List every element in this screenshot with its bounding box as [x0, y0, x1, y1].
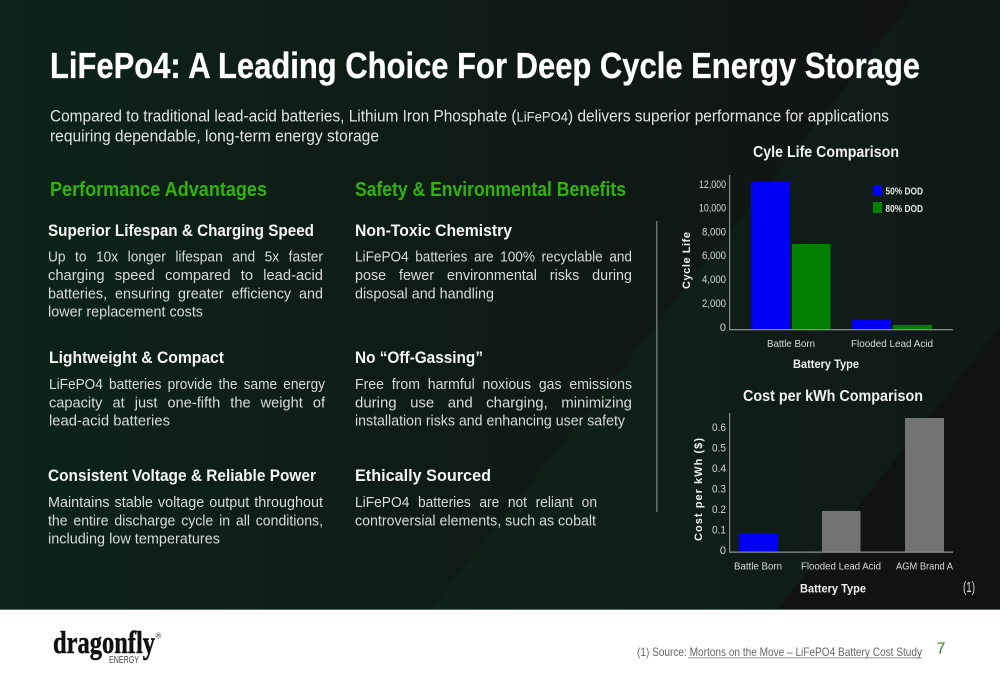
block: lightweight and compact: lead-acid batteries [49, 414, 170, 430]
block: consistent voltage: including low temperatures [48, 532, 220, 548]
block: non-toxic chemistry: disposal and handling [355, 286, 494, 302]
y axis labels [712, 422, 726, 557]
x axis labels [767, 338, 933, 350]
subtitle: requiring dependable, long-term energy storage [50, 128, 379, 146]
x axis labels: AGM Brand A [896, 560, 953, 572]
logo: dragonfly energy: ENERGY [109, 655, 139, 666]
block: ethically sourced: Ethically Sourced [355, 466, 491, 485]
block: superior lifespan [48, 221, 323, 320]
block: lightweight and compact: Lightweight & Compact [49, 348, 224, 367]
y axis labels: 4,000 [702, 274, 726, 286]
block: ethically sourced: controversial elements, such as cobalt [355, 513, 596, 529]
panel: performance advantages [48, 179, 326, 548]
block: non-toxic chemistry: Non-Toxic Chemistry [355, 221, 512, 240]
block: consistent voltage: the entire discharge cycle in all conditions, [48, 513, 323, 529]
logo: dragonfly energy: ® [156, 632, 162, 640]
y axis labels: 8,000 [702, 226, 726, 238]
block: superior lifespan: batteries, ensuring greater efficiency and [48, 286, 323, 302]
x axis labels [734, 560, 953, 572]
y axis labels [699, 179, 726, 334]
axes [729, 413, 953, 553]
x axis title: Battery Type [793, 357, 859, 371]
y axis labels: 0.6 [712, 422, 726, 434]
y axis labels: 10,000 [699, 202, 726, 214]
block: superior lifespan: lower replacement costs [48, 304, 203, 320]
y axis labels: 6,000 [702, 250, 726, 262]
y axis labels: 0 [720, 322, 726, 334]
bars: cost [739, 418, 944, 552]
source note: (1) Source: Mortons on the Move – LiFePO4 Battery Cost Study [637, 645, 922, 659]
heading: performance advantages: Performance Advantages [50, 179, 267, 201]
block: no off-gassing: installation risks and enhancing user safety [355, 414, 626, 430]
bars: battle born [751, 182, 830, 330]
chart title: Cyle Life Comparison [753, 144, 899, 161]
block: lightweight and compact: capacity at just one-fifth the weight of [49, 395, 326, 411]
y axis labels: 0.1 [712, 524, 726, 536]
chart: cost per kwh comparison [693, 388, 975, 596]
page number: 7 [936, 640, 946, 658]
block: consistent voltage [48, 466, 323, 548]
block: non-toxic chemistry: LiFePO4 batteries are 100% recyclable and [355, 250, 632, 266]
x axis labels: Flooded Lead Acid [851, 338, 933, 350]
block: no off-gassing: Free from harmful noxious gas emissions [355, 377, 632, 393]
axes [729, 175, 953, 330]
block: consistent voltage: Consistent Voltage & Reliable Power [48, 466, 316, 485]
block: non-toxic chemistry: pose fewer environmental risks during [355, 268, 632, 284]
y axis labels: 0.3 [712, 484, 726, 496]
chart title: Cost per kWh Comparison [743, 388, 923, 405]
subtitle: Compared to traditional lead-acid batteries, Lithium Iron Phosphate (LiFePO4) delivers superior performance for applications [50, 108, 889, 126]
x axis labels: Flooded Lead Acid [801, 560, 881, 572]
block: lightweight and compact [49, 348, 326, 430]
block: no off-gassing: during use and charging, minimizing [355, 395, 632, 411]
y axis labels: 0.2 [712, 504, 726, 516]
legend: 50% DOD [886, 186, 923, 198]
y axis labels: 12,000 [699, 179, 726, 191]
block: lightweight and compact: LiFePO4 batteries provide the same energy [49, 377, 326, 393]
x axis labels: Battle Born [734, 560, 782, 572]
y axis title: Cost per kWh ($) [693, 438, 705, 541]
block: no off-gassing [355, 348, 632, 430]
block: superior lifespan: Superior Lifespan & Charging Speed [48, 221, 314, 240]
citation marker: (1) [963, 579, 975, 596]
legend: 80% DOD [886, 204, 923, 215]
y axis labels: 0.4 [712, 463, 726, 475]
heading: safety and environmental benefits: Safety & Environmental Benefits [355, 179, 626, 201]
chart: cycle life comparison [681, 144, 953, 371]
x axis title: Battery Type [800, 582, 866, 596]
panel: safety and environmental benefits [355, 179, 632, 529]
block: consistent voltage: Maintains stable voltage output throughout [48, 495, 323, 511]
subtitle [50, 108, 889, 146]
block: superior lifespan: charging speed compared to lead-acid [48, 268, 323, 284]
block: ethically sourced [355, 466, 597, 529]
logo: dragonfly energy: dragonfly [53, 624, 155, 660]
y axis title: Cycle Life [681, 232, 693, 289]
x axis labels: Battle Born [767, 338, 815, 350]
block: no off-gassing: No “Off-Gassing” [355, 348, 483, 367]
y axis labels: 2,000 [702, 298, 726, 310]
block: non-toxic chemistry [355, 221, 632, 302]
block: ethically sourced: LiFePO4 batteries are not reliant on [355, 495, 597, 511]
bars: flooded lead acid [852, 320, 932, 330]
y axis labels: 0 [720, 545, 726, 557]
block: superior lifespan: Up to 10x longer lifespan and 5x faster [48, 250, 323, 266]
legend [873, 185, 923, 215]
y axis labels: 0.5 [712, 442, 726, 454]
